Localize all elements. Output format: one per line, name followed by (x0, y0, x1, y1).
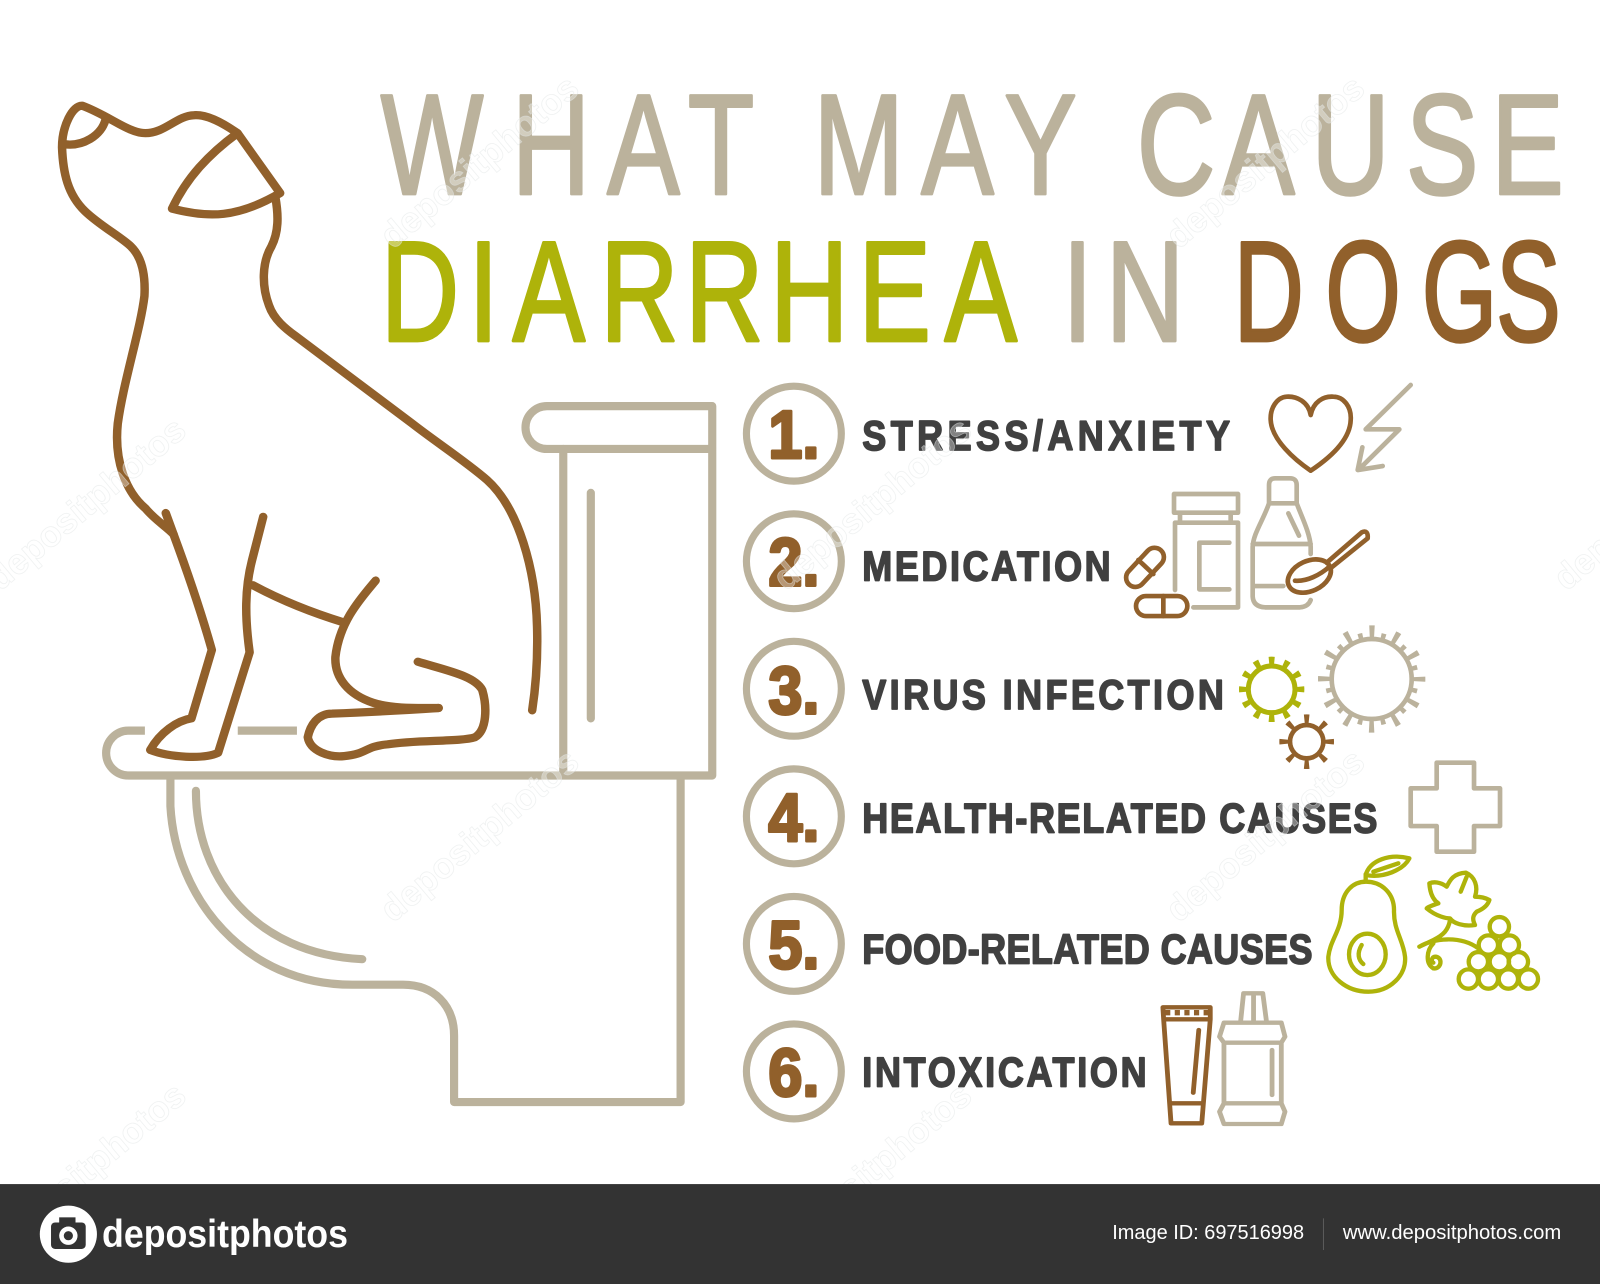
title line 2: DOGS (1234, 211, 1561, 371)
footer bar (0, 1184, 1600, 1284)
item 5: food-related causes (746, 896, 1312, 991)
toilet illustration (106, 406, 712, 1102)
item 5: food-related causes: 5. (768, 908, 819, 983)
item 3: virus infection: 3. (768, 653, 819, 728)
item 6: intoxication: 6. (768, 1036, 819, 1111)
icon: viruses (1243, 632, 1418, 763)
title (381, 64, 1564, 371)
item 2: medication: 2. (768, 526, 819, 601)
icon: pills, jar, bottle and spoon (1122, 478, 1368, 616)
item 3: virus infection (746, 641, 1224, 736)
watermarks: depositphotos (765, 409, 979, 598)
item 5: food-related causes: FOOD-RELATED CAUSES (862, 927, 1312, 973)
image id: Image ID: 697516998 (1112, 1222, 1304, 1244)
footer logo icon (40, 1206, 97, 1263)
title line 1: MAY (814, 64, 1077, 224)
icon: avocado and grapes (1328, 857, 1538, 992)
item 4: health-related causes (746, 769, 1377, 864)
title line 2: DIARRHEA (381, 211, 1017, 371)
watermarks: depositphotos (372, 67, 586, 256)
item 4: health-related causes: HEALTH-RELATED CAUSES (862, 796, 1377, 842)
item 2: medication (746, 514, 1111, 609)
title line 1: CAUSE (1137, 64, 1564, 224)
watermarks: depositphotos (372, 741, 586, 930)
website: www.depositphotos.com (1342, 1222, 1561, 1244)
watermarks: depositphotos (1158, 67, 1372, 256)
item 6: intoxication: INTOXICATION (862, 1050, 1147, 1096)
dog illustration (62, 106, 537, 757)
title line 1 (381, 64, 1564, 224)
icon: medical cross (1411, 763, 1500, 852)
item 1: stress/anxiety: 1. (768, 398, 819, 473)
title line 1: WHAT (381, 64, 754, 224)
footer logo wordmark: depositphotos (102, 1213, 348, 1256)
watermarks: depositphotos (1158, 741, 1372, 930)
item 2: medication: MEDICATION (862, 544, 1111, 590)
title line 2 (381, 211, 1561, 371)
item 3: virus infection: VIRUS INFECTION (862, 673, 1224, 719)
item 1: stress/anxiety: STRESS/ANXIETY (862, 414, 1230, 460)
item 1: stress/anxiety (746, 386, 1230, 481)
watermarks: depositphotos (765, 1075, 979, 1263)
icon: tube and mouthwash bottle (1163, 993, 1285, 1124)
item 6: intoxication (746, 1024, 1147, 1119)
item 4: health-related causes: 4. (768, 781, 819, 856)
title line 2: IN (1062, 211, 1184, 371)
icon: heart and lightning (1271, 385, 1411, 471)
